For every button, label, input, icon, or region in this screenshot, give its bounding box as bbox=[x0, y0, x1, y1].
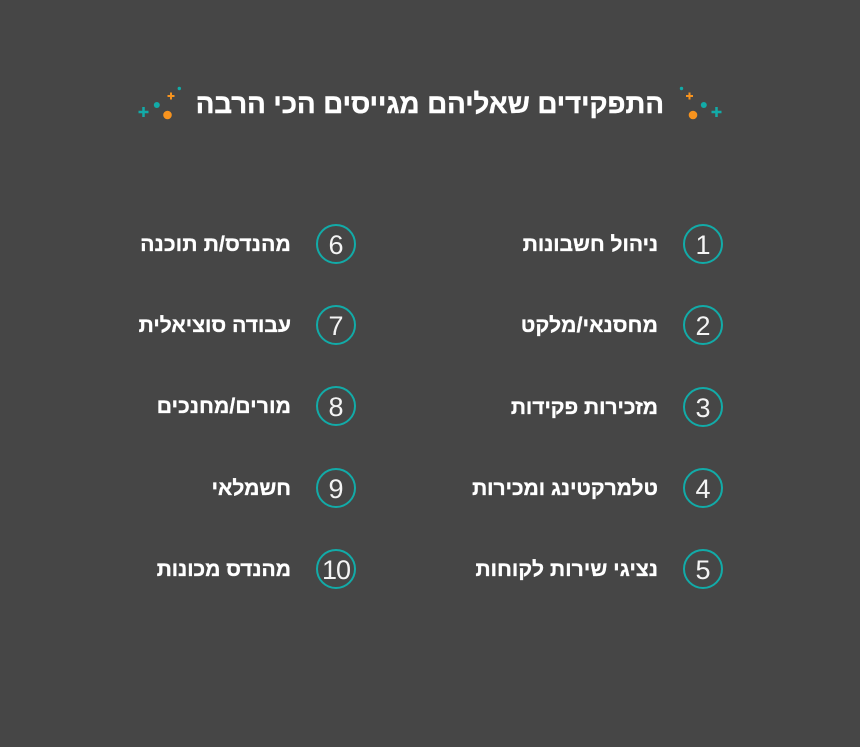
item 8: מורים/מחנכים bbox=[157, 395, 291, 418]
item 9: חשמלאי bbox=[212, 477, 291, 500]
item 6: מהנדס/ת תוכנה bbox=[140, 233, 291, 256]
number 10 bbox=[316, 549, 356, 589]
number 6 bbox=[316, 224, 356, 264]
item 7: עבודה סוציאלית bbox=[139, 314, 291, 337]
number 8 bbox=[316, 386, 356, 426]
number 5: 5 bbox=[695, 555, 711, 585]
number 7 bbox=[316, 305, 356, 345]
number 4 bbox=[683, 468, 723, 508]
item 3: מזכירות פקידות bbox=[511, 396, 658, 419]
number 3 bbox=[683, 387, 723, 427]
item 4: טלמרקטינג ומכירות bbox=[472, 477, 658, 500]
number 2 bbox=[683, 305, 723, 345]
number 9: 9 bbox=[328, 474, 344, 504]
number 5 bbox=[683, 549, 723, 589]
number 10: 10 bbox=[322, 555, 350, 585]
item 5: נציגי שירות לקוחות bbox=[475, 558, 658, 581]
icon: left sparkles bbox=[138, 86, 181, 120]
item 1: ניהול חשבונות bbox=[523, 233, 658, 256]
icon: right sparkles bbox=[680, 86, 722, 120]
number 3: 3 bbox=[695, 393, 711, 423]
number 1: 1 bbox=[695, 230, 711, 260]
number 9 bbox=[316, 468, 356, 508]
number 6: 6 bbox=[328, 230, 344, 260]
number 4: 4 bbox=[695, 474, 711, 504]
title: התפקידים שאליהם מגייסים הכי הרבה bbox=[196, 88, 664, 119]
item 2: מחסנאי/מלקט bbox=[521, 314, 658, 337]
number 2: 2 bbox=[695, 311, 711, 341]
number 1 bbox=[683, 224, 723, 264]
item 10: מהנדס מכונות bbox=[157, 558, 291, 581]
number 8: 8 bbox=[328, 392, 344, 422]
number 7: 7 bbox=[328, 311, 344, 341]
